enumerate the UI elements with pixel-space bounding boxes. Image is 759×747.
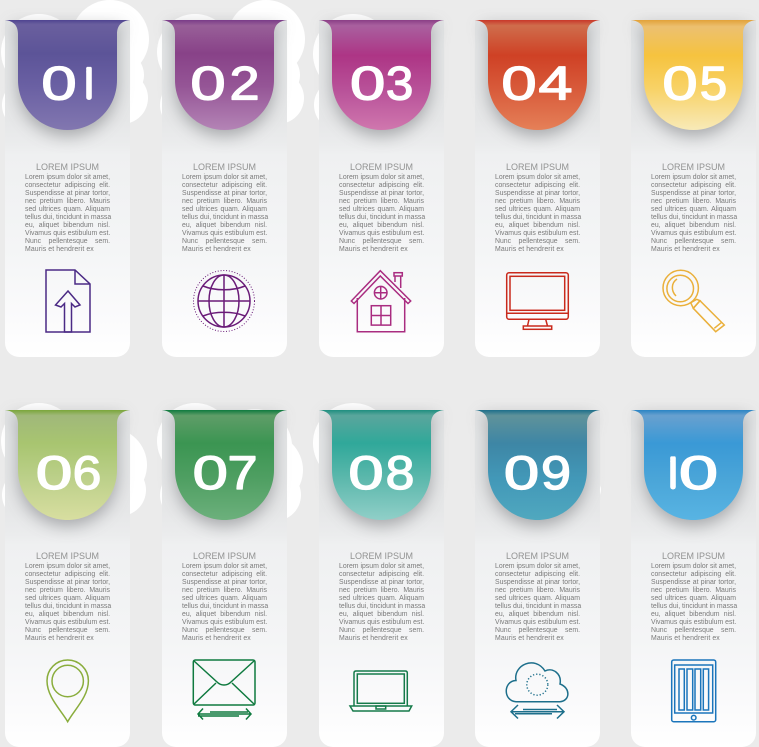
text block	[339, 562, 426, 642]
heading: LOREM IPSUM	[36, 551, 99, 561]
badge 09	[475, 406, 600, 535]
text block: nec pretium libero. Mauris	[495, 198, 580, 205]
text block: consectetur adipiscing elit.	[495, 571, 580, 578]
text block: consectetur adipiscing elit.	[339, 571, 424, 578]
badge 07	[162, 406, 287, 535]
text block: sed ultrices quam. Aliquam	[651, 206, 736, 213]
badge 03: 3	[386, 58, 413, 110]
text block: Nunc pellentesque sem.	[182, 238, 267, 245]
text block	[651, 562, 738, 642]
text block: sed ultrices quam. Aliquam	[339, 595, 424, 602]
text block: consectetur adipiscing elit.	[651, 182, 736, 189]
card 01	[5, 20, 130, 357]
badge 10: 0	[679, 447, 718, 499]
text block: nec pretium libero. Mauris	[25, 587, 110, 594]
text block: Suspendisse at pinar tortor,	[339, 190, 424, 197]
badge 06: 6	[73, 447, 101, 499]
icon: magnifier	[662, 270, 726, 333]
text block	[495, 174, 582, 253]
icon: file upload	[45, 269, 91, 333]
text block: Nunc pellentesque sem.	[25, 238, 110, 245]
text block	[339, 174, 426, 253]
badge 02	[162, 16, 287, 145]
text block	[182, 174, 268, 253]
text block: Suspendisse at pinar tortor,	[25, 190, 110, 197]
icon: monitor	[506, 272, 570, 330]
text block: eu, aliquet bibendum nisl.	[339, 222, 424, 229]
heading: LOREM IPSUM	[506, 162, 569, 172]
text block: eu, aliquet bibendum nisl.	[182, 611, 267, 618]
text block: Suspendisse at pinar tortor,	[182, 579, 267, 586]
badge 04: 4	[539, 57, 572, 110]
card 07	[162, 410, 287, 747]
text block: Lorem ipsum dolor sit amet,	[495, 174, 580, 181]
badge 01	[5, 16, 130, 145]
card 10	[631, 410, 756, 747]
text block: nec pretium libero. Mauris	[651, 198, 736, 205]
text block: Suspendisse at pinar tortor,	[651, 579, 736, 586]
badge 01: 1	[73, 56, 103, 116]
card 03	[319, 20, 444, 357]
text block: consectetur adipiscing elit.	[182, 571, 267, 578]
text block: nec pretium libero. Mauris	[651, 587, 736, 594]
text block: consectetur adipiscing elit.	[25, 182, 110, 189]
text block: Lorem ipsum dolor sit amet,	[182, 563, 267, 570]
text block: Suspendisse at pinar tortor,	[495, 579, 580, 586]
text block: Nunc pellentesque sem.	[182, 627, 267, 634]
text block: Suspendisse at pinar tortor,	[182, 190, 267, 197]
badge 03	[319, 16, 444, 145]
card 06	[5, 410, 130, 747]
text block: Lorem ipsum dolor sit amet,	[339, 174, 424, 181]
text block: eu, aliquet bibendum nisl.	[495, 222, 580, 229]
badge 06	[5, 406, 130, 535]
text block: tellus dui, tincidunt in massa	[495, 603, 581, 610]
text block: Vivamus quis estibulum est.	[25, 619, 110, 626]
heading: LOREM IPSUM	[193, 162, 256, 172]
text block: Mauris et hendrerit ex	[25, 246, 94, 253]
heading: LOREM IPSUM	[662, 551, 725, 561]
text block: nec pretium libero. Mauris	[495, 587, 580, 594]
badge 07: 0	[193, 446, 228, 499]
text block: Suspendisse at pinar tortor,	[25, 579, 110, 586]
badge 09: 9	[541, 446, 571, 499]
badge 02: 0	[190, 57, 226, 110]
text block: tellus dui, tincidunt in massa	[651, 603, 737, 610]
text block: Suspendisse at pinar tortor,	[339, 579, 424, 586]
text block: sed ultrices quam. Aliquam	[651, 595, 736, 602]
text block: Vivamus quis estibulum est.	[339, 230, 424, 237]
text block	[25, 174, 112, 253]
badge 10: 1	[657, 446, 687, 506]
text block: Nunc pellentesque sem.	[25, 627, 110, 634]
heading: LOREM IPSUM	[662, 162, 725, 172]
text block: nec pretium libero. Mauris	[182, 587, 267, 594]
text block: Vivamus quis estibulum est.	[182, 230, 267, 237]
card 08	[319, 410, 444, 747]
text block: eu, aliquet bibendum nisl.	[495, 611, 580, 618]
text block: consectetur adipiscing elit.	[182, 182, 267, 189]
badge 04	[475, 16, 600, 145]
icon: laptop	[348, 670, 413, 712]
text block: Lorem ipsum dolor sit amet,	[25, 174, 110, 181]
text block: nec pretium libero. Mauris	[25, 198, 110, 205]
text block: Nunc pellentesque sem.	[495, 238, 580, 245]
text block: tellus dui, tincidunt in massa	[25, 214, 111, 221]
card 04	[475, 20, 600, 357]
text block: Mauris et hendrerit ex	[651, 635, 720, 642]
badge 05	[631, 16, 756, 145]
text block: Vivamus quis estibulum est.	[651, 230, 736, 237]
text block: sed ultrices quam. Aliquam	[495, 595, 580, 602]
text block: eu, aliquet bibendum nisl.	[339, 611, 424, 618]
badge 03: 0	[350, 57, 385, 110]
text block: Mauris et hendrerit ex	[339, 246, 408, 253]
text block: Vivamus quis estibulum est.	[495, 619, 580, 626]
text block: Vivamus quis estibulum est.	[339, 619, 424, 626]
text block: Mauris et hendrerit ex	[182, 635, 251, 642]
text block: Suspendisse at pinar tortor,	[495, 190, 580, 197]
text block: Nunc pellentesque sem.	[651, 238, 736, 245]
heading: LOREM IPSUM	[350, 551, 413, 561]
badge 02: 2	[229, 57, 260, 110]
heading: LOREM IPSUM	[193, 551, 256, 561]
text block: Mauris et hendrerit ex	[339, 635, 408, 642]
text block: Lorem ipsum dolor sit amet,	[495, 563, 580, 570]
badge 08	[319, 406, 444, 535]
text block: sed ultrices quam. Aliquam	[182, 595, 267, 602]
badge 08: 8	[386, 447, 414, 499]
text block: Nunc pellentesque sem.	[339, 238, 424, 245]
text block: Suspendisse at pinar tortor,	[651, 190, 736, 197]
icon: globe	[193, 270, 255, 332]
text block: eu, aliquet bibendum nisl.	[25, 611, 110, 618]
text block: eu, aliquet bibendum nisl.	[651, 611, 736, 618]
text block: tellus dui, tincidunt in massa	[182, 214, 268, 221]
text block	[495, 562, 582, 642]
icon: envelope with arrows	[192, 659, 256, 720]
text block: eu, aliquet bibendum nisl.	[182, 222, 267, 229]
badge 05: 5	[700, 58, 727, 110]
icon: tablet	[670, 659, 716, 722]
text block: Lorem ipsum dolor sit amet,	[25, 563, 110, 570]
text block: sed ultrices quam. Aliquam	[182, 206, 267, 213]
text block: consectetur adipiscing elit.	[25, 571, 110, 578]
text block: Nunc pellentesque sem.	[339, 627, 424, 634]
text block: eu, aliquet bibendum nisl.	[25, 222, 110, 229]
text block: Mauris et hendrerit ex	[495, 246, 564, 253]
badge 04: 0	[501, 57, 537, 110]
text block: tellus dui, tincidunt in massa	[182, 603, 268, 610]
text block: Vivamus quis estibulum est.	[495, 230, 580, 237]
card 02	[162, 20, 287, 357]
badge 06: 0	[36, 447, 72, 500]
text block: tellus dui, tincidunt in massa	[495, 214, 581, 221]
heading: LOREM IPSUM	[506, 551, 569, 561]
text block: sed ultrices quam. Aliquam	[339, 206, 424, 213]
text block: nec pretium libero. Mauris	[339, 198, 424, 205]
text block: Vivamus quis estibulum est.	[651, 619, 736, 626]
icon: map pin	[46, 659, 90, 724]
heading: LOREM IPSUM	[36, 162, 99, 172]
badge 08: 0	[348, 446, 384, 499]
text block: tellus dui, tincidunt in massa	[651, 214, 737, 221]
icon: house	[350, 270, 412, 332]
badge 09: 0	[504, 446, 539, 499]
text block: nec pretium libero. Mauris	[182, 198, 267, 205]
text block: Nunc pellentesque sem.	[495, 627, 580, 634]
text block: sed ultrices quam. Aliquam	[25, 206, 110, 213]
text block: eu, aliquet bibendum nisl.	[651, 222, 736, 229]
text block: nec pretium libero. Mauris	[339, 587, 424, 594]
badge 07: 7	[227, 446, 258, 499]
text block: Mauris et hendrerit ex	[25, 635, 94, 642]
text block: tellus dui, tincidunt in massa	[339, 603, 425, 610]
text block: sed ultrices quam. Aliquam	[495, 206, 580, 213]
icon: cloud with arrows	[506, 662, 569, 719]
text block: Nunc pellentesque sem.	[651, 627, 736, 634]
text block: Lorem ipsum dolor sit amet,	[651, 174, 736, 181]
text block	[25, 562, 112, 642]
card 09	[475, 410, 600, 747]
text block: sed ultrices quam. Aliquam	[25, 595, 110, 602]
text block: Vivamus quis estibulum est.	[25, 230, 110, 237]
text block: Mauris et hendrerit ex	[182, 246, 251, 253]
badge 05: 0	[662, 57, 698, 110]
text block	[651, 174, 738, 253]
text block: tellus dui, tincidunt in massa	[25, 603, 111, 610]
text block: consectetur adipiscing elit.	[495, 182, 580, 189]
text block: tellus dui, tincidunt in massa	[339, 214, 425, 221]
text block: Lorem ipsum dolor sit amet,	[339, 563, 424, 570]
badge 01: 0	[41, 57, 77, 110]
text block: Lorem ipsum dolor sit amet,	[651, 563, 736, 570]
text block: consectetur adipiscing elit.	[651, 571, 736, 578]
badge 10	[631, 406, 756, 535]
text block	[182, 562, 268, 642]
text block: Vivamus quis estibulum est.	[182, 619, 267, 626]
text block: Lorem ipsum dolor sit amet,	[182, 174, 267, 181]
text block: Mauris et hendrerit ex	[651, 246, 720, 253]
text block: consectetur adipiscing elit.	[339, 182, 424, 189]
card 05	[631, 20, 756, 357]
heading: LOREM IPSUM	[350, 162, 413, 172]
text block: Mauris et hendrerit ex	[495, 635, 564, 642]
